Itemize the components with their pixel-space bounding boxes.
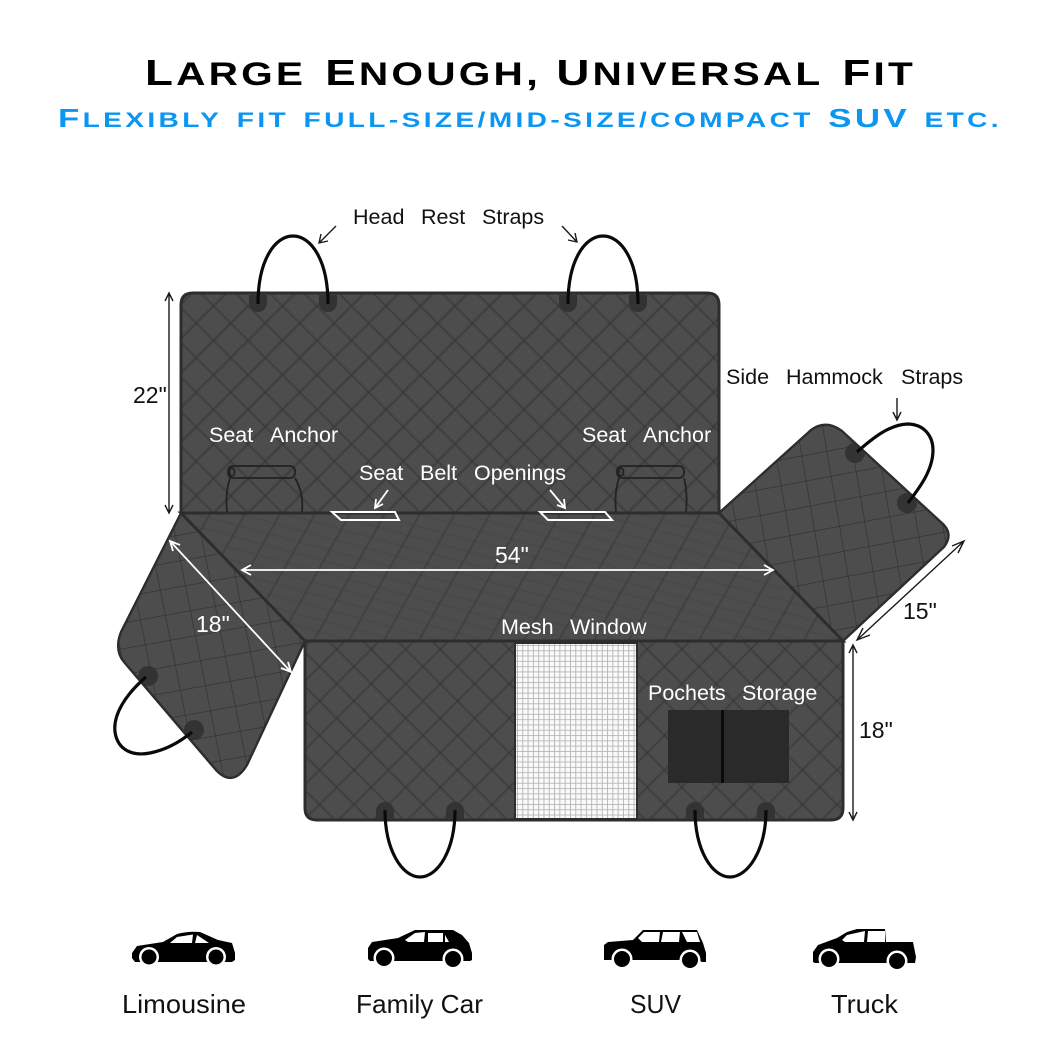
panel: left hammock flap <box>118 513 305 778</box>
label: truck: Truck <box>831 989 899 1019</box>
label: side hammock straps: Hammock <box>786 365 883 389</box>
label: seat anchor right: Anchor <box>643 423 711 447</box>
icon: SUV <box>604 930 706 970</box>
label: side hammock straps: Straps <box>901 365 963 389</box>
storage pockets <box>668 710 789 783</box>
title: Large Enough , Universal Fit <box>145 44 916 95</box>
icon: truck <box>813 929 916 972</box>
panel: seat base <box>181 513 843 641</box>
mesh window <box>514 642 638 820</box>
panel: right hammock flap <box>719 425 948 641</box>
label: seat anchor left: Seat <box>209 423 253 447</box>
dimension: 15 inch: 15" <box>903 598 937 624</box>
label: seat anchor right: Seat <box>582 423 626 447</box>
label: limousine: Limousine <box>122 989 246 1019</box>
label: head rest straps: Straps <box>482 205 544 229</box>
label: head rest straps: Head <box>353 205 404 229</box>
strap anchors top <box>249 295 647 312</box>
label: pockets storage: Pochets <box>648 681 726 705</box>
head rest straps <box>258 236 638 304</box>
seat belt openings <box>332 512 612 520</box>
dimension: 54 inch: 54" <box>495 542 529 568</box>
black dimension and pointer arrows <box>165 226 964 820</box>
label: mesh window: Mesh <box>501 615 554 639</box>
seat anchor left <box>226 466 302 512</box>
dimension: 18 inch flap: 18" <box>196 611 230 637</box>
label: pockets storage: Storage <box>742 681 817 705</box>
flap and base straps <box>115 424 933 877</box>
label: head rest straps: Rest <box>421 205 465 229</box>
label: seat belt openings: Seat <box>359 461 403 485</box>
panel: back rest <box>181 293 719 513</box>
label: mesh window: Window <box>570 615 647 639</box>
seat anchor right <box>615 466 687 512</box>
bottom strap anchors <box>376 802 775 819</box>
dimension: 18 inch drop: 18" <box>859 717 893 743</box>
panel: front drop <box>305 641 843 820</box>
label: seat anchor left: Anchor <box>270 423 338 447</box>
icon: family car <box>368 930 472 970</box>
dimension: 22 inch: 22" <box>133 382 167 408</box>
white arrows <box>170 490 773 672</box>
label: SUV: SUV <box>630 989 682 1019</box>
label: seat belt openings: Openings <box>474 461 566 485</box>
subtitle: Flexibly fit full -size /mid -size /compact SUV etc . <box>58 101 1002 134</box>
label: side hammock straps: Side <box>726 365 769 389</box>
seat cover diagram <box>115 236 948 877</box>
icon: limousine <box>132 932 235 967</box>
label: family car: Family Car <box>356 989 483 1019</box>
label: seat belt openings: Belt <box>420 461 457 485</box>
